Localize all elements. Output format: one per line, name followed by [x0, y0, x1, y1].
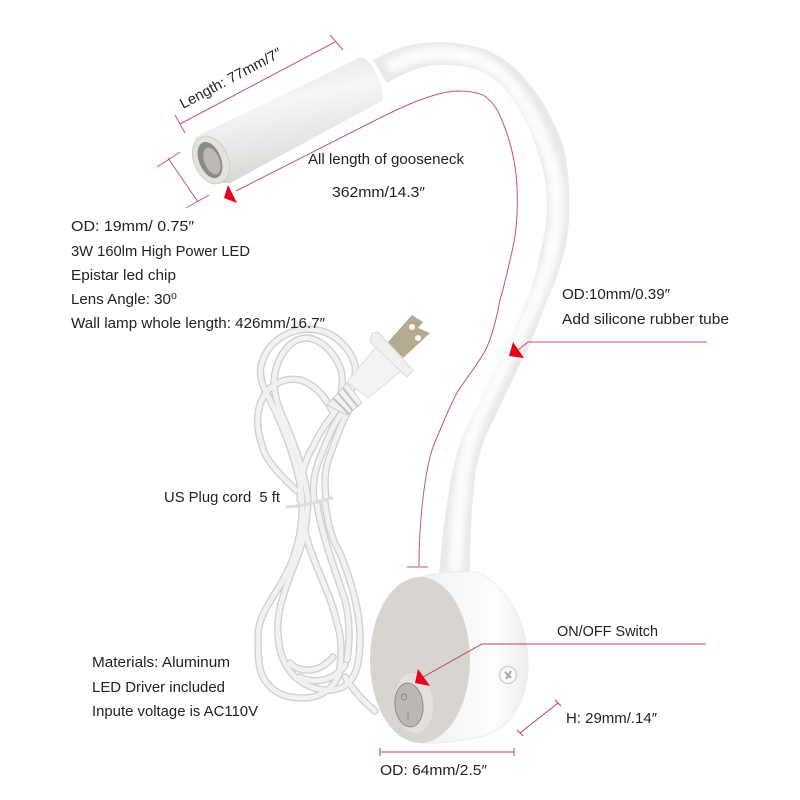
text block: tube specifications — [562, 287, 729, 328]
label: switch: ON/OFF Switch — [557, 624, 658, 640]
text block: head specifications: 3W 160lm High Power LED — [71, 244, 250, 260]
label: base height: H: 29mm/.14″ — [566, 711, 657, 727]
label: gooseneck length — [308, 152, 465, 201]
lamp head — [185, 58, 383, 190]
label: gooseneck length: All length of gooseneck — [308, 152, 465, 168]
arrow: gooseneck length — [224, 185, 237, 203]
arrow: switch — [415, 669, 430, 686]
leader: silicone tube — [518, 342, 707, 350]
head cylinder — [195, 58, 383, 183]
dimension: head diameter — [157, 152, 209, 208]
text block: materials — [92, 655, 258, 720]
plug body — [347, 342, 405, 398]
label: plug cord: US Plug cord 5 ft — [164, 490, 280, 506]
label: head length: Length: 77mm/7″ — [177, 45, 285, 113]
text block: materials: LED Driver included — [92, 680, 225, 696]
plug — [327, 315, 430, 415]
base face — [370, 577, 470, 743]
prongs — [388, 315, 430, 358]
label: base diameter: OD: 64mm/2.5″ — [380, 763, 487, 779]
text block: head specifications: Wall lamp whole length: 426mm/16.7″ — [71, 316, 325, 332]
text block: head specifications: Lens Angle: 30⁰ — [71, 292, 177, 308]
base body — [420, 572, 528, 743]
gooseneck tube — [373, 42, 569, 575]
lens — [193, 138, 227, 182]
dimension: base height — [517, 700, 561, 736]
cord outline — [258, 329, 375, 711]
text block: head specifications: OD: 19mm/ 0.75″ — [71, 219, 194, 235]
plug face — [370, 332, 413, 377]
dimension: base diameter — [380, 748, 514, 756]
cord tie — [287, 498, 332, 507]
text block: tube specifications: Add silicone rubber tube — [562, 312, 729, 328]
arrow: silicone tube — [509, 342, 524, 358]
switch markings — [402, 694, 408, 720]
lens ring — [185, 130, 237, 190]
wall base — [370, 572, 528, 743]
screw — [500, 666, 516, 684]
dimension: head length — [175, 35, 343, 133]
leader: gooseneck length — [236, 91, 517, 567]
leader: switch — [423, 644, 706, 677]
power cord — [258, 329, 375, 711]
text block: materials: Materials: Aluminum — [92, 655, 230, 671]
switch bezel — [392, 671, 436, 735]
cord highlight — [258, 329, 375, 711]
text block: tube specifications: OD:10mm/0.39″ — [562, 287, 670, 303]
switch rocker — [393, 682, 425, 728]
label: gooseneck length: 362mm/14.3″ — [332, 185, 425, 201]
strain relief — [327, 383, 362, 415]
text block: head specifications — [71, 219, 325, 332]
text block: head specifications: Epistar led chip — [71, 268, 176, 284]
text block: materials: Inpute voltage is AC110V — [92, 704, 258, 720]
